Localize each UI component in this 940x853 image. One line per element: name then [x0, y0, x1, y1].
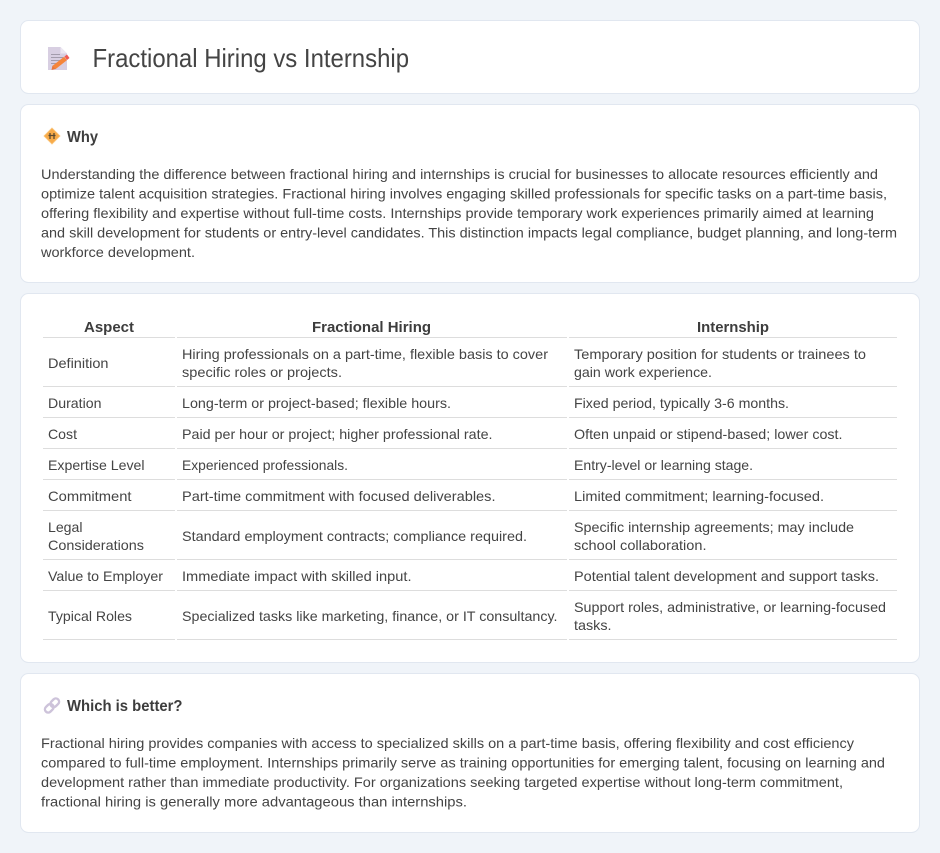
row: commitment: Limited commitment; learning-focused.: [574, 488, 824, 504]
row: commitment: [43, 488, 897, 511]
row: typical roles: Support roles, administrative, or learning-focused: [574, 599, 886, 615]
row: legal considerations: Legal: [48, 519, 82, 535]
row: legal considerations: Specific internship agreements; may include: [574, 519, 854, 535]
row: expertise level: [43, 457, 897, 480]
panel: comparison table: [20, 294, 920, 662]
table header row: Internship: [697, 320, 769, 336]
row: typical roles: tasks.: [574, 617, 612, 633]
row: definition: Hiring professionals on a part-time, flexible basis to cover: [182, 346, 548, 362]
text block: verdict: compared to full-time employment. Internships primarily serve as training opportunities for emerging talent, focusing on learning and: [41, 754, 885, 770]
panel: title header: [20, 20, 920, 94]
text block: why explanation: Understanding the difference between fractional hiring and internships is crucial for businesses to allocate resources efficiently and: [41, 166, 878, 182]
row: duration: Duration: [48, 395, 102, 411]
panel: which is better: [20, 674, 920, 832]
row: legal considerations: [43, 519, 897, 560]
heading: why: Why: [67, 129, 98, 146]
text block: why explanation: offering flexibility and expertise without full-time costs. Internships provide temporary work experiences primarily aimed at learning: [41, 205, 874, 221]
text block: verdict: fractional hiring is generally more advantageous than internships.: [41, 794, 467, 810]
table header row: [43, 320, 897, 338]
text block: why explanation: [40, 166, 897, 260]
row: duration: [43, 395, 897, 418]
text block: verdict: [41, 735, 885, 810]
text block: verdict: Fractional hiring provides companies with access to specialized skills on a part-time basis, offering flexibility and cost efficiency: [41, 735, 854, 751]
row: duration: Fixed period, typically 3-6 months.: [574, 395, 789, 411]
row: duration: Long-term or project-based; flexible hours.: [182, 395, 451, 411]
icon: memo with pencil: [48, 47, 70, 70]
row: cost: Cost: [48, 426, 77, 442]
icon: orange diamond sign: [44, 128, 60, 144]
row: typical roles: Typical Roles: [48, 608, 132, 624]
row: definition: Temporary position for students or trainees to: [574, 346, 866, 362]
row: cost: Often unpaid or stipend-based; lower cost.: [574, 426, 842, 442]
row: expertise level: Experienced professionals.: [182, 457, 348, 473]
row: legal considerations: Standard employment contracts; compliance required.: [182, 528, 527, 544]
row: definition: gain work experience.: [574, 364, 712, 380]
row: expertise level: Expertise Level: [48, 457, 144, 473]
text block: why explanation: and skill development for students or entry-level candidates. This distinction impacts legal compliance, budget planning, and long-term: [41, 224, 897, 240]
row: definition: [43, 346, 897, 387]
row: legal considerations: Considerations: [48, 537, 144, 553]
heading: which is better: Which is better?: [67, 698, 182, 715]
row: typical roles: [43, 599, 897, 640]
row: value to employer: [43, 568, 897, 591]
title: Fractional Hiring vs Internship: [92, 45, 409, 73]
row: value to employer: Value to Employer: [48, 568, 163, 584]
row: typical roles: Specialized tasks like marketing, finance, or IT consultancy.: [182, 608, 558, 624]
row: cost: Paid per hour or project; higher professional rate.: [182, 426, 492, 442]
text block: verdict: development rather than immediate productivity. For organizations seeking targeted expertise without long-term commitment,: [41, 774, 843, 790]
icon: chain link: [44, 697, 60, 714]
row: commitment: Commitment: [48, 488, 132, 504]
row: legal considerations: school collaboration.: [574, 537, 706, 553]
panel: why: [20, 104, 920, 282]
row: definition: specific roles or projects.: [182, 364, 342, 380]
table header row: Fractional Hiring: [312, 320, 431, 336]
row: expertise level: Entry-level or learning stage.: [574, 457, 753, 473]
row: cost: [43, 426, 897, 449]
row: commitment: Part-time commitment with focused deliverables.: [182, 488, 496, 504]
text block: why explanation: optimize talent acquisition strategies. Fractional hiring involves engaging skilled professionals for specific tasks on a part-time basis,: [41, 186, 887, 202]
row: value to employer: Immediate impact with skilled input.: [182, 568, 412, 584]
table header row: Aspect: [84, 320, 134, 336]
row: value to employer: Potential talent development and support tasks.: [574, 568, 879, 584]
row: definition: Definition: [48, 355, 108, 371]
text block: why explanation: workforce development.: [40, 244, 195, 260]
